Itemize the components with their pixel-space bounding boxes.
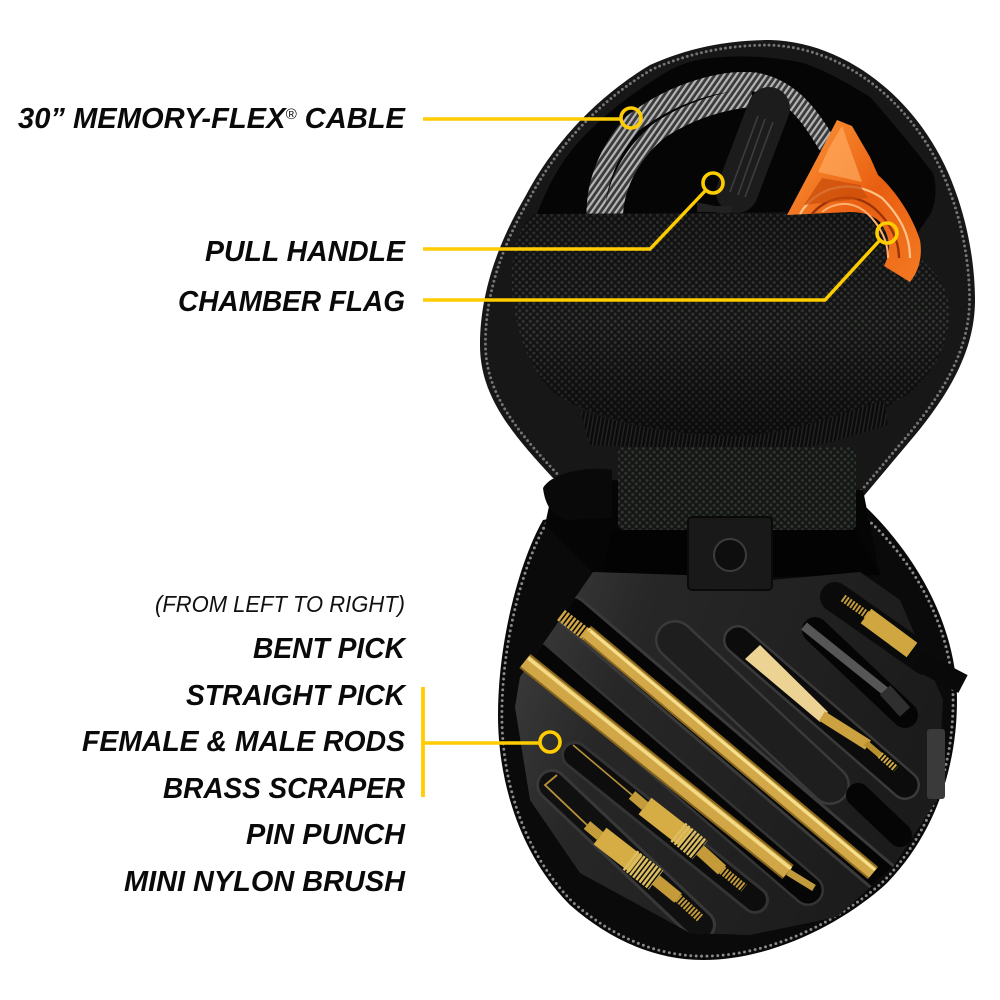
steel cable — [596, 81, 828, 214]
label: bent pick: BENT PICK — [253, 633, 407, 665]
label: pin punch: PIN PUNCH — [246, 819, 406, 851]
label: brass scraper: BRASS SCRAPER — [163, 773, 405, 805]
product photo: open zip case — [480, 40, 975, 960]
side zipper pull — [543, 469, 612, 520]
tray clip — [688, 517, 772, 590]
label: pull handle: PULL HANDLE — [205, 236, 407, 268]
inner lining — [600, 530, 880, 580]
lower case shell — [498, 490, 957, 960]
mini nylon brush — [804, 598, 963, 712]
case interior above pocket — [530, 56, 936, 300]
label: mini nylon brush: MINI NYLON BRUSH — [124, 866, 406, 898]
brass scraper — [745, 645, 896, 769]
callout: memory-flex cable — [423, 108, 641, 128]
label: chamber flag: CHAMBER FLAG — [178, 286, 405, 318]
pin punch two: bent pick — [545, 775, 700, 918]
lower case lining fill — [545, 478, 880, 580]
pull handle — [700, 108, 773, 211]
label: memory-flex cable: ® — [286, 106, 298, 123]
chamber flag — [787, 120, 921, 282]
label: memory-flex cable: 30” MEMORY-FLEX — [18, 103, 284, 135]
centre strap — [618, 447, 856, 530]
tray slots — [535, 597, 925, 925]
plastic tool tray — [515, 517, 945, 935]
callout: rods bracket — [423, 687, 560, 797]
label: female and male rods: FEMALE & MALE RODS — [82, 726, 406, 758]
callout: pull handle — [423, 173, 723, 249]
upper case shell — [480, 40, 975, 497]
pin punch one: straight pick — [573, 745, 744, 888]
label: from left to right: (FROM LEFT TO RIGHT) — [155, 591, 405, 617]
tray side latch — [927, 729, 945, 799]
female rod — [525, 658, 814, 888]
male rod with thread — [561, 615, 875, 873]
label: straight pick: STRAIGHT PICK — [186, 680, 407, 712]
callout: chamber flag — [423, 223, 897, 300]
elastic folds — [580, 400, 888, 452]
pocket fabric — [512, 212, 949, 436]
label: memory-flex cable: CABLE — [297, 103, 407, 135]
